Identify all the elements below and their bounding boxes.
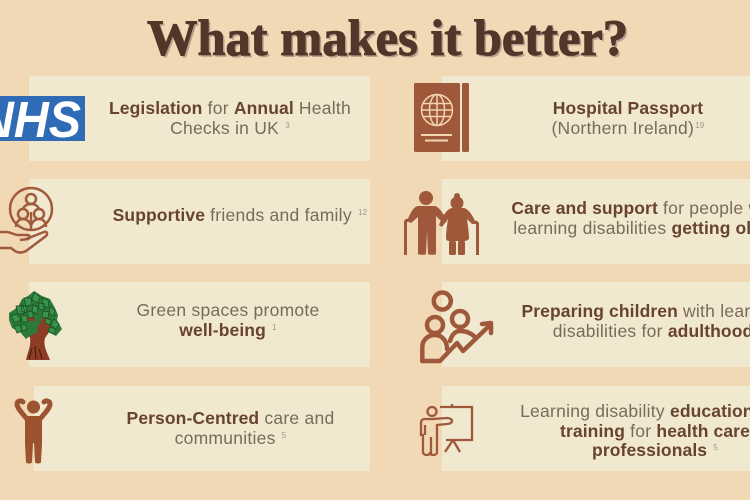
icon: hand holding family bbox=[0, 186, 54, 254]
panel: care when getting older bbox=[442, 179, 750, 264]
icon: elderly couple bbox=[404, 191, 479, 255]
icon: person with raised arms bbox=[14, 398, 52, 464]
text: green spaces: Green spaces promote bbox=[136, 300, 320, 320]
text: hospital passport: Hospital Passport bbox=[553, 98, 703, 118]
text: hospital passport: (Northern Ireland)19 bbox=[551, 118, 705, 138]
icon: passport bbox=[414, 83, 469, 152]
text: legislation: Legislation for Annual Health bbox=[109, 98, 351, 118]
icon: tree bbox=[9, 291, 62, 360]
text: person-centred: communities 5 bbox=[175, 428, 286, 448]
text: care and support bbox=[511, 198, 750, 238]
text: green spaces bbox=[136, 300, 320, 340]
text: legislation: Checks in UK 3 bbox=[170, 118, 290, 138]
panel: hospital passport bbox=[442, 76, 750, 161]
icon: presenter at board bbox=[420, 404, 474, 456]
text: preparing children bbox=[521, 301, 750, 340]
panel: person-centred care bbox=[34, 386, 370, 471]
panel: supportive friends and family bbox=[29, 179, 370, 264]
panel: NHS legislation bbox=[29, 76, 370, 161]
panel: green spaces bbox=[29, 282, 370, 367]
text: hospital passport bbox=[551, 98, 705, 138]
text: legislation bbox=[109, 98, 351, 138]
text: person-centred: Person-Centred care and bbox=[127, 408, 334, 428]
text: supportive friends: Supportive friends and family 12 bbox=[113, 205, 367, 225]
text: green spaces: well-being 1 bbox=[179, 320, 277, 340]
panel: preparing children bbox=[442, 282, 750, 367]
title: What makes it better? bbox=[147, 10, 628, 66]
text: person-centred bbox=[127, 408, 334, 448]
text: preparing children: disabilities for adulthood bbox=[553, 320, 750, 340]
text: education and training: training for health care bbox=[560, 420, 750, 440]
icon: people with growth arrow bbox=[420, 290, 494, 364]
panel: education and training bbox=[442, 386, 750, 471]
text: education and training bbox=[520, 401, 750, 460]
text: education and training: professionals 5 bbox=[592, 440, 718, 460]
